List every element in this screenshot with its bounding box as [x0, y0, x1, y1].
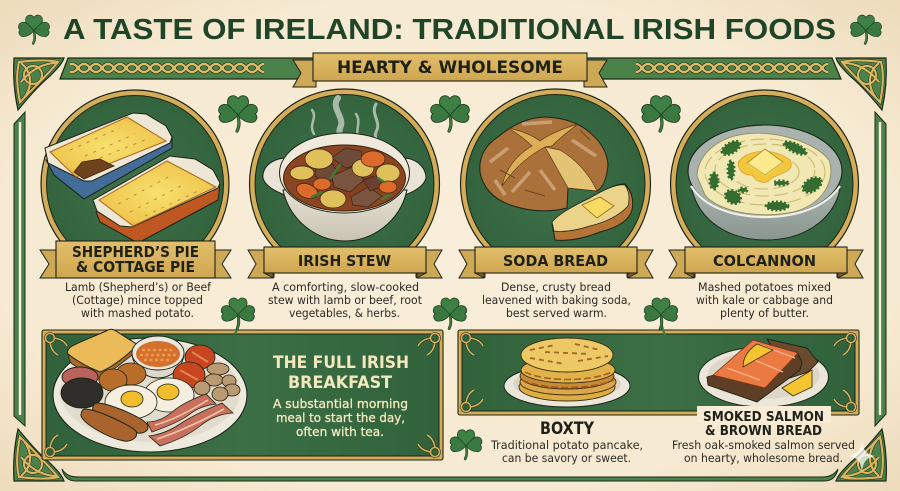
- bowl of beans: [132, 336, 184, 378]
- ribbon label: shepherd's pie: SHEPHERD’S PIE: [72, 243, 199, 261]
- description: boxty: can be savory or sweet.: [502, 451, 631, 465]
- description: colcannon: with kale or cabbage and: [696, 293, 833, 307]
- icon: sparkle mark: [849, 440, 875, 472]
- description: shepherd's pie: with mashed potato.: [81, 306, 194, 320]
- ribbon label: shepherd's pie: [40, 241, 231, 278]
- description: smoked salmon and brown bread: SMOKED SALMON: [703, 409, 824, 425]
- icon: stew bowl: [263, 133, 426, 241]
- ribbon label: colcannon: COLCANNON: [713, 252, 816, 270]
- description: smoked salmon and brown bread: on hearty, wholesome bread.: [684, 451, 843, 465]
- description: colcannon: [696, 280, 833, 320]
- icon: breakfast plate: [53, 329, 247, 452]
- illustration circle: stew: [248, 88, 440, 246]
- panel: colcannon: [669, 90, 863, 320]
- panel: boxty and smoked salmon: [458, 330, 859, 465]
- icon: smoked salmon on brown bread: [698, 339, 828, 407]
- icon: shamrock above centre gap: [433, 298, 467, 329]
- description: irish stew: stew with lamb or beef, root: [268, 293, 422, 307]
- icon: shamrock top right: [850, 15, 882, 43]
- icon: shamrock above breakfast panel: [221, 298, 255, 334]
- description: soda bread: leavened with baking soda,: [482, 293, 631, 307]
- description: soda bread: Dense, crusty bread: [501, 280, 611, 294]
- sausages: [81, 403, 148, 441]
- ribbon label: soda bread: [459, 247, 653, 278]
- icon: colcannon bowl: [688, 125, 842, 240]
- icon: shamrock between circles 2 and 3: [431, 96, 469, 131]
- description: smoked salmon and brown bread: [672, 406, 855, 465]
- sliced sausage and black pudding: [61, 367, 103, 408]
- heading: the full irish breakfast: [273, 353, 409, 393]
- description: smoked salmon and brown bread: & BROWN BREAD: [705, 423, 822, 439]
- description: colcannon: plenty of butter.: [720, 306, 809, 320]
- potato farls: [99, 363, 146, 391]
- panel: soda bread: [459, 89, 653, 320]
- illustration circle: soda bread: [460, 88, 652, 246]
- panel: irish stew: [248, 89, 442, 320]
- icon: bread slice with butter: [552, 184, 633, 240]
- description: shepherd's pie: Lamb (Shepherd’s) or Beef: [65, 280, 212, 294]
- ribbon label: soda bread: SODA BREAD: [503, 252, 608, 270]
- description: smoked salmon and brown bread: Fresh oak-smoked salmon served: [672, 438, 855, 452]
- ribbon label: irish stew: [248, 247, 442, 278]
- bacon: [147, 394, 233, 446]
- icon: blue pie dish: [45, 113, 172, 199]
- description: soda bread: [482, 280, 631, 320]
- description: full irish breakfast: [273, 396, 408, 439]
- description: boxty: BOXTY: [540, 419, 595, 438]
- fried eggs: [105, 378, 194, 419]
- description: boxty: Traditional potato pancake,: [490, 438, 643, 452]
- icon: orange pie dish: [93, 156, 220, 243]
- description: full irish breakfast: meal to start the day,: [276, 410, 405, 425]
- panel frame: [458, 330, 859, 415]
- heading: the full irish breakfast: BREAKFAST: [288, 373, 392, 393]
- mushrooms: [194, 363, 240, 401]
- description: irish stew: A comforting, slow-cooked: [272, 280, 419, 294]
- description: full irish breakfast: A substantial morning: [273, 396, 408, 411]
- heading: the full irish breakfast: THE FULL IRISH: [273, 353, 409, 373]
- icon: shamrock lower centre: [450, 430, 482, 459]
- description: irish stew: [268, 280, 422, 320]
- illustration circle: pies: [40, 89, 230, 240]
- ribbon label: shepherd's pie: & COTTAGE PIE: [76, 258, 195, 276]
- panel: the full irish breakfast: [42, 329, 443, 460]
- icon: shamrock between circles 3 and 4: [642, 96, 680, 131]
- panel: shepherd's pie and cottage pie: [40, 90, 231, 320]
- ribbon label: irish stew: IRISH STEW: [298, 252, 391, 270]
- ribbon label: colcannon: [669, 247, 863, 278]
- tomatoes: [173, 345, 215, 388]
- description: colcannon: Mashed potatoes mixed: [698, 280, 831, 294]
- illustration circle: colcannon: [670, 89, 860, 246]
- title: A TASTE OF IRELAND: TRADITIONAL IRISH FOODS: [63, 14, 836, 46]
- description: shepherd's pie: (Cottage) mince topped: [72, 293, 203, 307]
- icon: soda bread loaf: [480, 117, 608, 211]
- section banner: hearty and wholesome: HEARTY & WHOLESOME: [337, 58, 563, 78]
- description: full irish breakfast: often with tea.: [296, 424, 384, 439]
- description: irish stew: vegetables, & herbs.: [289, 306, 400, 320]
- toast: [68, 329, 138, 380]
- icon: shamrock between circles 1 and 2: [219, 96, 257, 131]
- section banner: hearty and wholesome: [293, 53, 607, 87]
- description: soda bread: best served warm.: [506, 306, 607, 320]
- icon: boxty pancakes on plate: [504, 338, 630, 407]
- icon: shamrock top left: [18, 15, 50, 43]
- description: boxty: [490, 419, 643, 465]
- icon: steam: [312, 98, 378, 146]
- panel frame: [42, 330, 443, 460]
- icon: shamrock above boxty panel: [644, 298, 678, 335]
- description: shepherd's pie: [65, 280, 212, 320]
